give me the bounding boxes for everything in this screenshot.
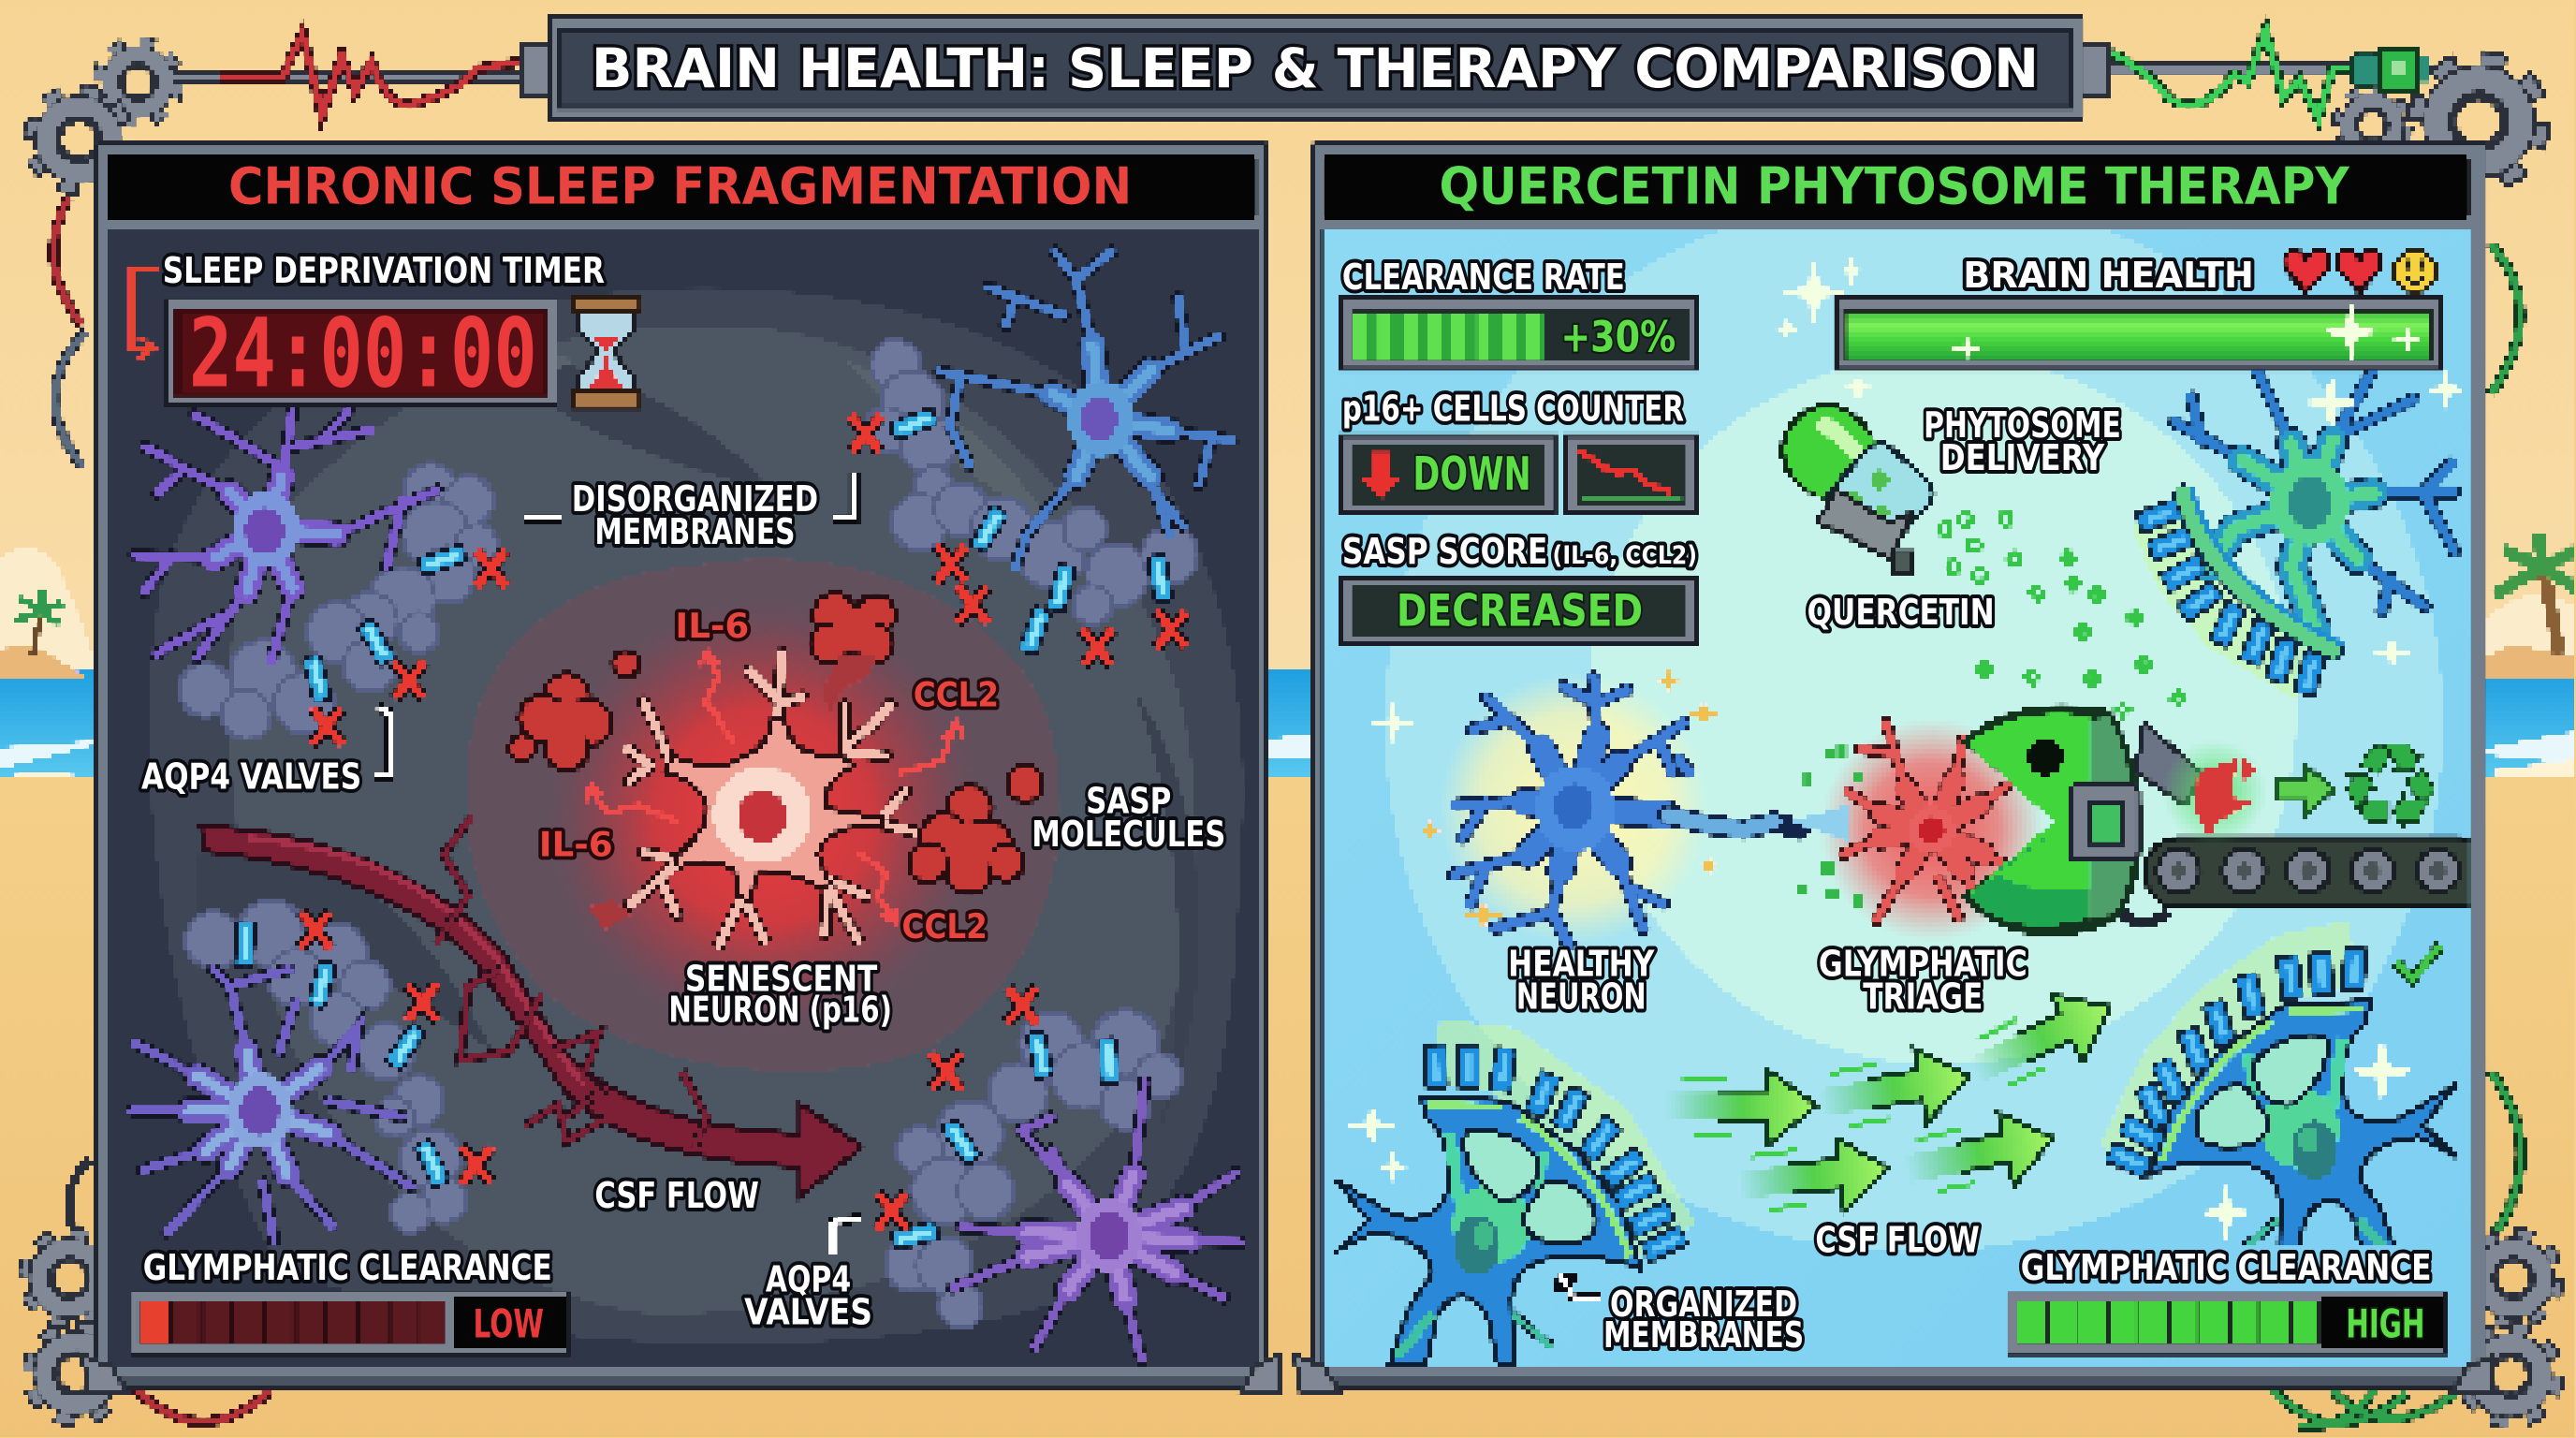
neuron: damaged red <box>1843 723 2017 920</box>
icon: gear bottom-right <box>2467 1332 2554 1418</box>
neuron: top-right green with membrane <box>2175 372 2454 651</box>
green debris near triage <box>1799 742 1863 909</box>
wires and gears: right side <box>2086 30 2554 1427</box>
membranes: bottom-right cluster <box>886 1010 1181 1328</box>
label: CCL2 lower: CCL2 <box>902 906 988 946</box>
neuron: top-left purple <box>135 411 437 661</box>
glymphatic clearance meter low <box>130 1290 570 1356</box>
label: brain health: BRAIN HEALTH <box>1963 255 2254 297</box>
label: senescent neuron: NEURON (p16) <box>668 990 892 1032</box>
icon: gear small top-left <box>101 45 175 119</box>
membranes: top-left cluster <box>179 463 498 740</box>
label: healthy neuron: HEALTHY <box>1508 943 1655 985</box>
label: disorganized membranes <box>572 478 818 553</box>
icon: gear small top-right <box>2339 92 2405 157</box>
title banner frame <box>522 15 2108 122</box>
water channels on top-right neuron <box>2133 496 2328 699</box>
SASP molecule clusters <box>509 594 1044 930</box>
neuron: bottom-right purple <box>953 1081 1240 1360</box>
neuron: lower-left organized <box>1336 1096 1641 1364</box>
meter: brain health <box>1835 299 2439 370</box>
icon: phytosome capsule <box>1763 385 1941 575</box>
icon: green plug <box>2352 48 2428 91</box>
neuron: senescent red <box>627 654 920 945</box>
label: glymphatic clearance right: GLYMPHATIC CLEARANCE <box>2021 1247 2431 1289</box>
label: SASP score: SASP SCORE <box>1342 531 1547 573</box>
water channels on lower-right neuron <box>2103 946 2367 1181</box>
red glow behind damaged neuron <box>1821 718 2043 942</box>
AQP4 channels and X marks <box>233 404 1186 1253</box>
membranes: bottom-left cluster <box>185 901 466 1232</box>
label: phytosome delivery: DELIVERY <box>1940 437 2105 479</box>
membrane glow, lower-right neuron <box>2130 953 2354 1160</box>
label bracket lines <box>374 472 862 1255</box>
meter: clearance rate <box>1342 299 1697 370</box>
meter value: LOW: LOW <box>474 1301 544 1347</box>
label: SASP score: (IL-6, CCL2) <box>1553 542 1697 570</box>
panel: chronic sleep fragmentation <box>82 141 1278 1393</box>
wires and gears: left side <box>28 33 542 1422</box>
icon: gear lower-right <box>2472 1238 2554 1319</box>
icon: check mark <box>2397 945 2441 979</box>
membranes: top-right cluster <box>864 340 1197 624</box>
smoke background <box>149 288 1243 1343</box>
label: glymphatic triage <box>1819 943 2027 1019</box>
meter value: DECREASED: DECREASED <box>1397 586 1643 638</box>
timer digits: 24:00:00 <box>189 299 537 409</box>
label: organized membranes: ORGANIZED <box>1610 1284 1797 1326</box>
icon: gear large top-right <box>2422 64 2537 179</box>
heading: left panel: CHRONIC SLEEP FRAGMENTATION <box>228 157 1132 216</box>
quercetin particles <box>1939 513 2188 720</box>
icon: gear large top-left <box>34 95 124 184</box>
label: phytosome delivery: PHYTOSOME <box>1924 404 2121 447</box>
label: senescent neuron: SENESCENT <box>685 958 878 1000</box>
icon: hearts and smiley <box>2284 251 2436 292</box>
sparkles <box>1348 257 2467 1240</box>
label: sleep deprivation timer: SLEEP DEPRIVATION TIMER <box>163 250 605 292</box>
label: SASP molecules: MOLECULES <box>1032 814 1225 856</box>
membrane glow, top-right neuron <box>2159 516 2310 674</box>
sleep deprivation timer display <box>165 298 559 405</box>
neuron: bottom-left purple-blue <box>131 969 411 1240</box>
icon: red debris in green glow <box>2162 740 2267 844</box>
label: IL-6 upper: IL-6 <box>675 606 749 646</box>
label: glymphatic clearance left: GLYMPHATIC CLEARANCE <box>143 1247 552 1289</box>
senescent glow <box>466 559 1060 1071</box>
label: AQP4 valves lower: AQP4 <box>766 1258 851 1300</box>
neuron: lower-right organized <box>2150 1001 2456 1269</box>
label: senescent neuron <box>668 958 892 1032</box>
membrane glow, lower-left neuron <box>1436 1051 1667 1240</box>
glymphatic clearance meter high <box>2006 1290 2448 1356</box>
icon: right palm tree <box>2494 534 2576 654</box>
meter value: HIGH: HIGH <box>2346 1301 2424 1347</box>
label: healthy neuron: NEURON <box>1516 976 1647 1019</box>
label: SASP molecules: SASP <box>1086 781 1171 823</box>
icon: green arrow to recycle <box>2277 766 2334 814</box>
organized membranes pointer <box>1559 1275 1602 1298</box>
pale glow circles <box>1385 194 2443 1252</box>
icon: hourglass <box>572 298 641 407</box>
label: organized membranes <box>1603 1284 1804 1357</box>
label: quercetin: QUERCETIN <box>1808 592 1995 634</box>
water channels on lower-left neuron <box>1423 1043 1690 1265</box>
icon: conveyor belt <box>2145 838 2491 907</box>
label: glymphatic triage: GLYMPHATIC <box>1819 943 2027 985</box>
icon: gear bottom-left <box>33 1330 119 1416</box>
label: disorganized membranes: MEMBRANES <box>594 511 795 553</box>
meter: p16 counter down <box>1342 435 1554 513</box>
meter value: DOWN: DOWN <box>1412 447 1531 501</box>
label: IL-6 lower: IL-6 <box>539 824 613 864</box>
label: clearance rate: CLEARANCE RATE <box>1342 257 1625 299</box>
title: BRAIN HEALTH: SLEEP & THERAPY COMPARISON <box>592 37 2039 100</box>
yellow burst behind healthy neuron <box>1439 674 1708 943</box>
label: organized membranes: MEMBRANES <box>1603 1314 1804 1357</box>
panel: quercetin phytosome therapy <box>1295 141 2494 1393</box>
icon: p16 decreasing sparkline <box>1567 435 1695 513</box>
label: healthy neuron <box>1508 943 1655 1019</box>
timer bracket arrow <box>131 268 158 360</box>
label: p16 cells counter: p16+ CELLS COUNTER <box>1342 388 1684 430</box>
label: CCL2 upper: CCL2 <box>914 675 999 715</box>
label: AQP4 valves upper: AQP4 VALVES <box>141 756 361 798</box>
CSF flow arrow <box>200 816 862 1196</box>
label: CSF flow right: CSF FLOW <box>1815 1219 1980 1261</box>
label: CSF flow left: CSF FLOW <box>594 1175 759 1217</box>
icon: gear lower-left <box>28 1238 110 1319</box>
icon: Pac-Man triage machine <box>1962 704 2202 937</box>
meter value: +30%: +30% <box>1560 313 1676 362</box>
label: phytosome delivery <box>1924 404 2121 479</box>
label: disorganized membranes: DISORGANIZED <box>572 478 818 521</box>
heading: right panel: QUERCETIN PHYTOSOME THERAPY <box>1439 157 2349 216</box>
label: AQP4 valves lower <box>744 1258 872 1334</box>
neuron: top-right blue <box>940 252 1232 566</box>
icon: recycle symbol: ♻ <box>2337 719 2443 857</box>
label: SASP molecules <box>1032 781 1225 856</box>
neuron: healthy blue <box>1454 677 1799 945</box>
icon: left palm tree <box>15 592 63 654</box>
meter: SASP decreased <box>1342 577 1695 644</box>
label: glymphatic triage: TRIAGE <box>1863 976 1983 1019</box>
red secretion trails <box>585 653 964 922</box>
label: AQP4 valves lower: VALVES <box>744 1292 872 1334</box>
green CSF flow arrows <box>1666 974 2128 1224</box>
